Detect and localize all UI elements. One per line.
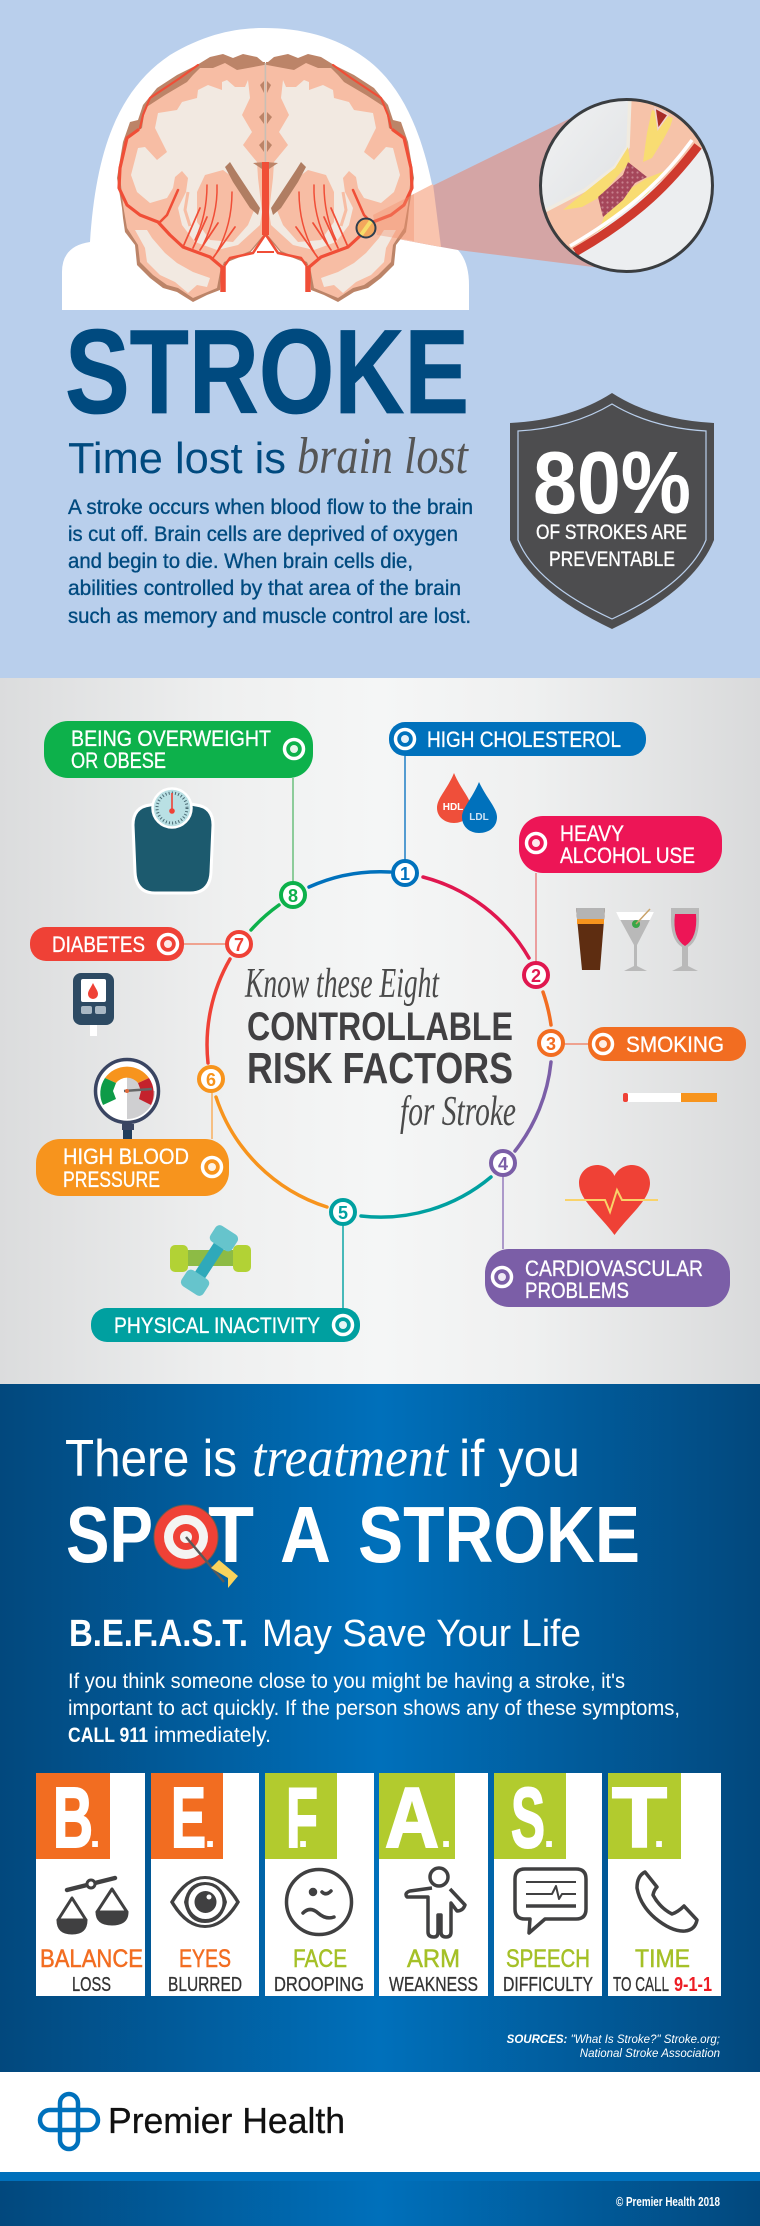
heading: spot a stroke: A: [280, 1490, 331, 1579]
call to action paragraph: immediately.: [154, 1724, 271, 1747]
icon: bathroom scale: [133, 788, 213, 893]
pill: diabetes: [30, 927, 184, 961]
card: speech: [494, 1771, 602, 1996]
subheading: befast: B.E.F.A.S.T.: [69, 1613, 248, 1655]
heading: spot a stroke: O: [156, 1490, 216, 1579]
icon: drooping face: [286, 1870, 352, 1934]
card: speech: SPEECH: [506, 1945, 590, 1973]
card: time: T: [612, 1771, 667, 1866]
node 3: [539, 1031, 563, 1055]
subtitle: brain lost: [297, 428, 469, 485]
card: speech: S: [511, 1771, 545, 1866]
icon: cigarette: [623, 1093, 717, 1102]
pill: smoking: SMOKING: [626, 1032, 724, 1057]
node 5: 5: [338, 1203, 348, 1223]
subheading: befast: May Save Your Life: [262, 1613, 581, 1655]
card: time: .: [653, 1812, 665, 1856]
card: face: F: [286, 1771, 318, 1866]
icon: HDL and LDL drops: LDL: [469, 812, 489, 823]
call to action paragraph: If you think someone close to you might be having a stroke, it's: [68, 1670, 625, 1693]
panel: stroke intro: [0, 0, 760, 678]
icon: target with arrow: [154, 1505, 238, 1588]
card: balance: .: [89, 1812, 101, 1856]
sources: SOURCES: "What Is Stroke?" Stroke.org;: [507, 2034, 720, 2046]
card: face: [265, 1771, 374, 1996]
heading: spot a stroke: T: [208, 1490, 254, 1579]
pill: being overweight: OR OBESE: [71, 748, 166, 773]
intro paragraph: [68, 496, 473, 628]
node 1: [393, 861, 417, 885]
card: face: DROOPING: [274, 1974, 364, 1996]
heading: spot a stroke: [66, 1490, 640, 1579]
heading: there is treatment if you: treatment: [252, 1427, 449, 1489]
icon: speech bubble: [515, 1869, 586, 1933]
card: eyes: [151, 1771, 259, 1996]
sources: National Stroke Association: [580, 2048, 720, 2060]
pill: cardiovascular problems: CARDIOVASCULAR: [525, 1256, 703, 1281]
card: time: [608, 1771, 721, 1996]
card: time: TIME: [635, 1945, 690, 1973]
sources: [507, 2034, 720, 2060]
card: arm: .: [440, 1812, 452, 1856]
node 1: 1: [400, 864, 410, 884]
call to action paragraph: [68, 1670, 680, 1747]
subtitle: Time lost is: [68, 434, 286, 483]
panel: footer bar: [0, 2172, 760, 2226]
left hemisphere: [117, 54, 265, 302]
intro paragraph: abilities controlled by that area of the brain: [68, 577, 461, 600]
icon: blood pressure gauge: [96, 1060, 158, 1139]
heading: there is treatment if you: if you: [459, 1430, 580, 1488]
pill: physical inactivity: [91, 1308, 360, 1342]
icon: phone: [637, 1872, 697, 1931]
pill: heavy alcohol use: HEAVY: [560, 821, 624, 846]
icon: heart with ECG: [565, 1165, 658, 1235]
node 6: 6: [206, 1070, 216, 1090]
pill: physical inactivity: PHYSICAL INACTIVITY: [114, 1313, 320, 1338]
panel: footer logo: [0, 2072, 760, 2172]
card: eyes: .: [204, 1812, 216, 1856]
card: eyes: E: [171, 1771, 206, 1866]
panel: risk factors: [0, 678, 760, 1384]
heading: there is treatment if you: [65, 1427, 580, 1489]
node 3: 3: [546, 1034, 556, 1054]
pill: high blood pressure: PRESSURE: [63, 1167, 160, 1192]
shield: 80% preventable: OF STROKES ARE: [536, 521, 687, 544]
card: arm: ARM: [407, 1945, 460, 1973]
shield: 80% preventable: 80%: [533, 433, 691, 532]
panel: spot a stroke: [0, 1384, 760, 2072]
icon: dumbbells: [170, 1223, 251, 1298]
node 8: [281, 883, 305, 907]
pill: high blood pressure: [36, 1139, 229, 1196]
card: speech: DIFFICULTY: [503, 1974, 593, 1996]
card: eyes: BLURRED: [168, 1974, 242, 1996]
node 5: [331, 1200, 355, 1224]
pill: heavy alcohol use: [519, 816, 722, 873]
center text: know these eight: for Stroke: [400, 1089, 516, 1135]
ring arcs: [207, 872, 551, 1217]
brain illustration: [117, 54, 414, 302]
center text: know these eight: Know these Eight: [244, 961, 440, 1007]
shield: 80% preventable: PREVENTABLE: [549, 548, 675, 571]
center text: know these eight: CONTROLLABLE: [247, 1005, 513, 1049]
intro paragraph: such as memory and muscle control are lost.: [68, 605, 471, 628]
card: balance: B: [53, 1771, 93, 1866]
blockage marker: [356, 218, 376, 238]
pill: cardiovascular problems: [485, 1249, 730, 1307]
pill: being overweight: [44, 721, 313, 778]
card: time: TO CALL: [613, 1974, 669, 1996]
pill: high cholesterol: [389, 722, 646, 756]
node 4: 4: [498, 1154, 508, 1174]
title: STROKE: [65, 305, 469, 439]
icon: HDL and LDL drops: [437, 773, 497, 833]
node 8: 8: [288, 886, 298, 906]
call to action paragraph: important to act quickly. If the person shows any of these symptoms,: [68, 1697, 680, 1720]
heading: there is treatment if you: There is: [65, 1430, 237, 1488]
subheading: befast: [69, 1613, 581, 1655]
shield: 80% preventable: [510, 393, 714, 629]
magnifier cone: [373, 115, 601, 268]
logo mark: [40, 2094, 98, 2149]
logo text: Premier Health: [108, 2100, 345, 2141]
node 4: [491, 1151, 515, 1175]
call to action paragraph: CALL 911: [68, 1724, 148, 1747]
white head silhouette: [62, 28, 469, 310]
connector lines: [184, 756, 588, 1308]
pill: high blood pressure: HIGH BLOOD: [63, 1144, 189, 1169]
icon: drinks: [576, 908, 699, 971]
intro paragraph: is cut off. Brain cells are deprived of oxygen: [68, 523, 458, 546]
icon: arm weakness person: [406, 1868, 465, 1937]
heading: spot a stroke: SP: [66, 1490, 153, 1579]
card: face: .: [297, 1812, 309, 1856]
card: time: 9-1-1: [674, 1974, 712, 1996]
icon: scales: [58, 1878, 127, 1933]
center text: know these eight: [244, 961, 516, 1135]
card: eyes: EYES: [179, 1945, 231, 1973]
magnified artery with clot: [539, 98, 714, 273]
card: arm: [379, 1771, 488, 1996]
pill: being overweight: BEING OVERWEIGHT: [71, 726, 271, 751]
card: arm: WEAKNESS: [389, 1974, 478, 1996]
subtitle: [68, 428, 469, 485]
icon: HDL and LDL drops: HDL: [443, 802, 463, 813]
card: arm: A: [385, 1771, 439, 1866]
heading: spot a stroke: STROKE: [358, 1490, 640, 1579]
intro paragraph: A stroke occurs when blood flow to the brain: [68, 496, 473, 519]
node 6: [199, 1067, 223, 1091]
node 2: [524, 963, 548, 987]
icon: eye: [170, 1876, 240, 1928]
center text: know these eight: RISK FACTORS: [247, 1044, 513, 1093]
card: balance: [36, 1771, 145, 1996]
card: balance: BALANCE: [40, 1945, 143, 1973]
card: balance: LOSS: [72, 1974, 111, 1996]
pill: diabetes: DIABETES: [52, 932, 145, 957]
icon: glucose meter: [73, 973, 114, 1036]
pill: smoking: [588, 1027, 746, 1061]
node 7: [227, 932, 251, 956]
node 7: 7: [234, 935, 244, 955]
node 2: 2: [531, 966, 541, 986]
panel: footer bar: © Premier Health 2018: [616, 2195, 720, 2209]
pill: cardiovascular problems: PROBLEMS: [525, 1278, 629, 1303]
pill: high cholesterol: HIGH CHOLESTEROL: [427, 727, 621, 752]
card: speech: .: [543, 1812, 555, 1856]
card: face: FACE: [293, 1945, 347, 1973]
pill: heavy alcohol use: ALCOHOL USE: [560, 843, 695, 868]
intro paragraph: and begin to die. When brain cells die,: [68, 550, 413, 573]
